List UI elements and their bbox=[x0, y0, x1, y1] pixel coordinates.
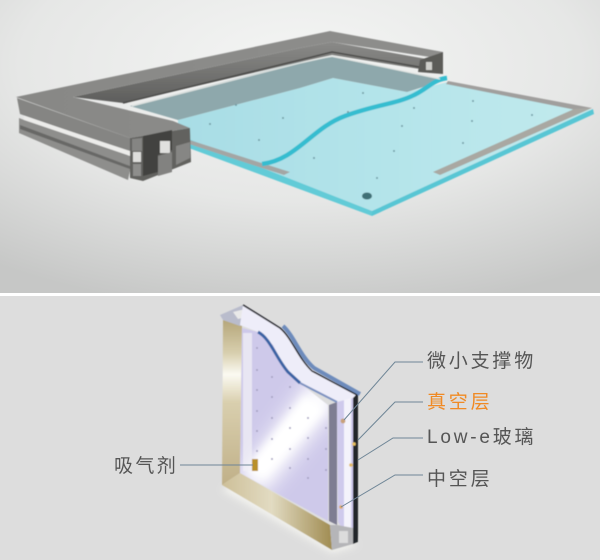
small support pillars bbox=[341, 419, 345, 423]
frame top corner bbox=[220, 305, 252, 326]
frame side: upper face bbox=[17, 98, 130, 152]
highlight in rebate bbox=[132, 56, 440, 106]
side: white band bbox=[344, 398, 351, 540]
illustration: vacuum glass cross-section bbox=[220, 305, 360, 553]
gold spacer frame: bottom bbox=[222, 473, 332, 550]
soft glow behind frame bbox=[222, 480, 358, 553]
side: black layer bbox=[353, 393, 358, 544]
line: vacuum layer bbox=[358, 402, 423, 440]
wave: glass gap seal bbox=[262, 78, 447, 164]
blue wave band: rear bbox=[283, 326, 360, 394]
side: grey glass edge bbox=[329, 402, 337, 525]
label: 吸气剂: 吸气剂 bbox=[114, 455, 178, 477]
glass edge: right bbox=[372, 109, 594, 216]
grey spacer: front strip bbox=[180, 137, 290, 175]
back arm end section bbox=[418, 52, 443, 74]
side: lavender cavity bbox=[337, 398, 353, 544]
bottom seal bbox=[330, 525, 353, 550]
line: micro support bbox=[344, 362, 423, 420]
line: getter bbox=[180, 464, 253, 466]
panel: top background bbox=[0, 0, 600, 293]
getter hole bbox=[362, 192, 372, 200]
glass pane with dots bbox=[240, 328, 328, 520]
grey spacer: right strip bbox=[433, 108, 592, 175]
blue wave band: front bbox=[258, 332, 300, 383]
leader lines bbox=[180, 362, 423, 507]
getter patch bbox=[252, 459, 258, 471]
glass sheet bbox=[178, 78, 593, 211]
frame rebate bbox=[73, 42, 443, 103]
label: 中空层: 中空层 bbox=[427, 468, 492, 490]
frame side: lower face bbox=[19, 118, 133, 180]
frame side: white strip bbox=[24, 116, 133, 157]
grey spacer: back edge bbox=[446, 81, 592, 110]
left dotted spacer column bbox=[243, 333, 252, 471]
support dots bbox=[209, 92, 533, 179]
frame top surface bbox=[16, 31, 443, 138]
blue edge: front right bbox=[300, 383, 337, 402]
rear glass pale wave area bbox=[240, 305, 357, 402]
gold spacer frame: left bbox=[222, 320, 242, 485]
dots on pane bbox=[256, 347, 327, 479]
line: low-e glass bbox=[358, 438, 423, 460]
glass edge: front bbox=[178, 135, 372, 216]
label: 真空层: 真空层 bbox=[427, 391, 492, 413]
illustration: glass in aluminium frame bbox=[16, 31, 594, 216]
line: hollow layer bbox=[341, 475, 423, 507]
groove line in rebate bbox=[123, 52, 425, 103]
glass shadow region inside frame bbox=[130, 57, 447, 120]
label: 微小支撑物: 微小支撑物 bbox=[427, 350, 536, 372]
frame cut section bbox=[130, 128, 191, 181]
black wave edge bbox=[243, 305, 357, 395]
label: Low-e玻璃: Low-e玻璃 bbox=[427, 426, 536, 448]
panel: bottom background bbox=[0, 296, 600, 560]
